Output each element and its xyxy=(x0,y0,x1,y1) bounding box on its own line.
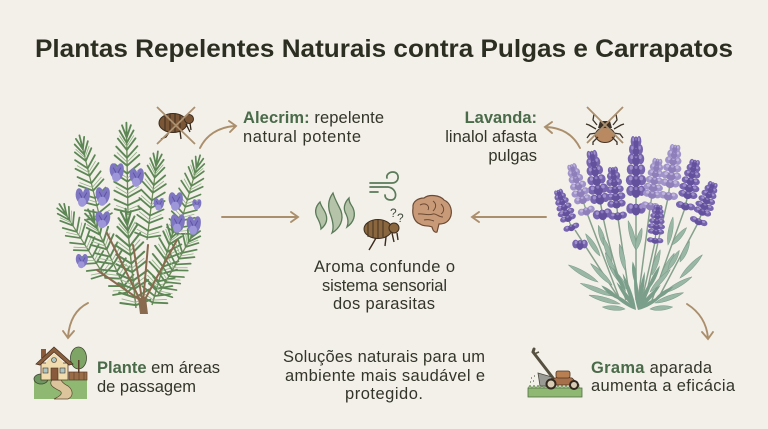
icon: confused flea xyxy=(364,220,399,250)
icon: tick crossed out xyxy=(586,107,624,145)
text: aroma line 1: Aroma confunde o xyxy=(314,258,455,276)
title: Plantas Repelentes Naturais contra Pulgas e Carrapatos xyxy=(35,35,733,63)
arrow: lavender to mowing tip xyxy=(687,304,713,339)
text: linalol afasta: linalol afasta xyxy=(445,128,538,146)
rosemary flowers xyxy=(76,163,201,268)
illustration: rosemary plant xyxy=(49,122,212,314)
icon: aroma waves xyxy=(316,193,354,233)
arrow: rosemary to centre xyxy=(222,212,298,222)
icon: wind xyxy=(370,172,398,200)
text: pulgas: pulgas xyxy=(488,147,537,165)
text: de passagem: de passagem xyxy=(97,378,196,396)
arrow: lavender to Lavanda xyxy=(545,122,580,148)
arrow: rosemary to planting tip xyxy=(63,303,88,338)
text: Grama: Grama aparada xyxy=(591,359,713,377)
question mark: ? xyxy=(397,211,404,225)
text: Plante: Plante em áreas xyxy=(97,359,220,377)
lavender foliage xyxy=(567,217,704,312)
arrow: lavender to centre xyxy=(472,212,546,222)
text: natural potente: natural potente xyxy=(243,128,361,146)
icon: flea crossed out xyxy=(157,107,195,144)
text: aumenta a eficacia: aumenta a eficácia xyxy=(591,377,736,395)
text: conclusion line 3: protegido. xyxy=(345,385,423,403)
text: aroma line 3: dos parasitas xyxy=(333,295,435,313)
text: conclusion line 2: ambiente mais saudável e xyxy=(285,367,485,385)
text: conclusion line 1: Soluções naturais para um xyxy=(283,348,485,366)
icon: brain xyxy=(413,196,451,232)
text: Lavanda: Lavanda: xyxy=(465,109,537,127)
arrow: rosemary to Alecrim xyxy=(200,121,236,148)
text: aroma line 2: sistema sensorial xyxy=(322,277,447,295)
illustration: lavender plant xyxy=(550,136,723,312)
lavender flower spikes xyxy=(550,136,723,250)
icon: house and garden xyxy=(34,347,87,399)
icon: lawn mower xyxy=(528,349,582,397)
text: Alecrim: Alecrim: repelente xyxy=(243,109,384,127)
question mark: ? xyxy=(390,206,397,220)
